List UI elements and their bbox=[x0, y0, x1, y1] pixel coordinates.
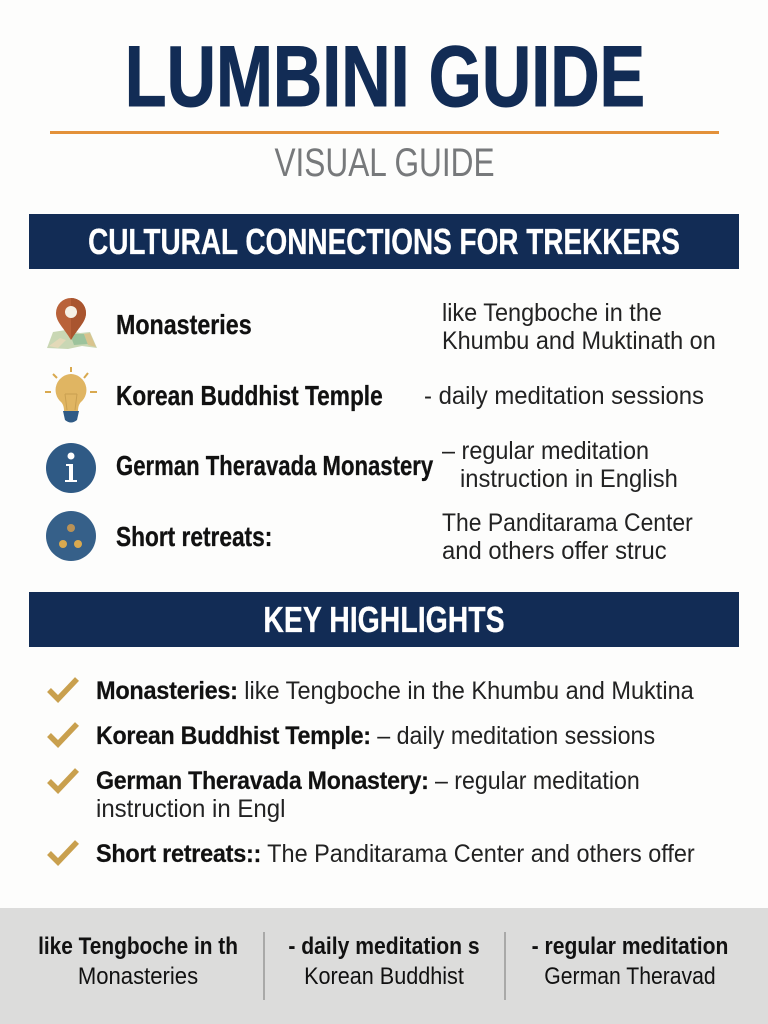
footer column 2 bbox=[288, 933, 480, 990]
highlight 4: Short retreats:: The Panditarama Center and others offer bbox=[96, 840, 695, 868]
text: korean temple: - daily meditation sessions bbox=[424, 382, 704, 410]
label: monasteries: Monasteries bbox=[116, 309, 252, 340]
heading: cultural connections bbox=[29, 214, 739, 269]
check icon 2 bbox=[47, 722, 79, 748]
footer column 3: German Theravad bbox=[544, 963, 716, 990]
title underline bbox=[50, 131, 719, 134]
panel: cultural connections list bbox=[45, 298, 716, 565]
text: short retreats bbox=[442, 509, 693, 565]
text: short retreats: and others offer struc bbox=[442, 537, 667, 565]
label: short retreats: Short retreats: bbox=[116, 521, 272, 552]
check icon 3 bbox=[47, 768, 79, 794]
highlight 3: German Theravada Monastery: – regular meditation bbox=[96, 767, 640, 795]
highlight 3 bbox=[96, 767, 640, 823]
icon: dots bbox=[46, 511, 96, 561]
text: german monastery bbox=[442, 437, 678, 493]
label: german monastery: German Theravada Monastery bbox=[116, 450, 433, 481]
text: monasteries: like Tengboche in the bbox=[442, 299, 662, 327]
footer column 3: - regular meditation bbox=[532, 933, 728, 960]
footer panel bbox=[0, 908, 768, 1024]
icon: light bulb bbox=[45, 367, 97, 422]
text: german monastery: instruction in English bbox=[460, 465, 678, 493]
check icon 1 bbox=[47, 677, 79, 703]
title: LUMBINI GUIDE bbox=[125, 29, 645, 125]
footer column 1: Monasteries bbox=[78, 963, 198, 990]
footer divider 2 bbox=[504, 932, 506, 1000]
text: german monastery: – regular meditation bbox=[442, 437, 649, 465]
heading: key highlights bbox=[29, 592, 739, 647]
text: monasteries: Khumbu and Muktinath on bbox=[442, 327, 716, 355]
footer column 3 bbox=[532, 933, 728, 990]
footer column 1: like Tengboche in th bbox=[38, 933, 238, 960]
subtitle: VISUAL GUIDE bbox=[274, 141, 495, 185]
icon: map pin bbox=[47, 298, 97, 349]
footer column 2: Korean Buddhist bbox=[304, 963, 464, 990]
highlight 3: instruction in Engl bbox=[96, 795, 285, 823]
highlight 1: Monasteries: like Tengboche in the Khumbu and Muktina bbox=[96, 677, 694, 705]
heading: key highlights: KEY HIGHLIGHTS bbox=[263, 599, 505, 640]
highlight 2: Korean Buddhist Temple: – daily meditation sessions bbox=[96, 722, 655, 750]
footer divider 1 bbox=[263, 932, 265, 1000]
heading: cultural connections: CULTURAL CONNECTIONS FOR TREKKERS bbox=[88, 221, 680, 262]
footer column 1 bbox=[38, 933, 238, 990]
text: monasteries bbox=[442, 299, 716, 355]
label: korean temple: Korean Buddhist Temple bbox=[116, 380, 383, 411]
check icon 4 bbox=[47, 840, 79, 866]
text: short retreats: The Panditarama Center bbox=[442, 509, 693, 537]
panel: key highlights list bbox=[47, 677, 695, 868]
footer column 2: - daily meditation s bbox=[288, 933, 480, 960]
icon: info bbox=[46, 443, 96, 493]
